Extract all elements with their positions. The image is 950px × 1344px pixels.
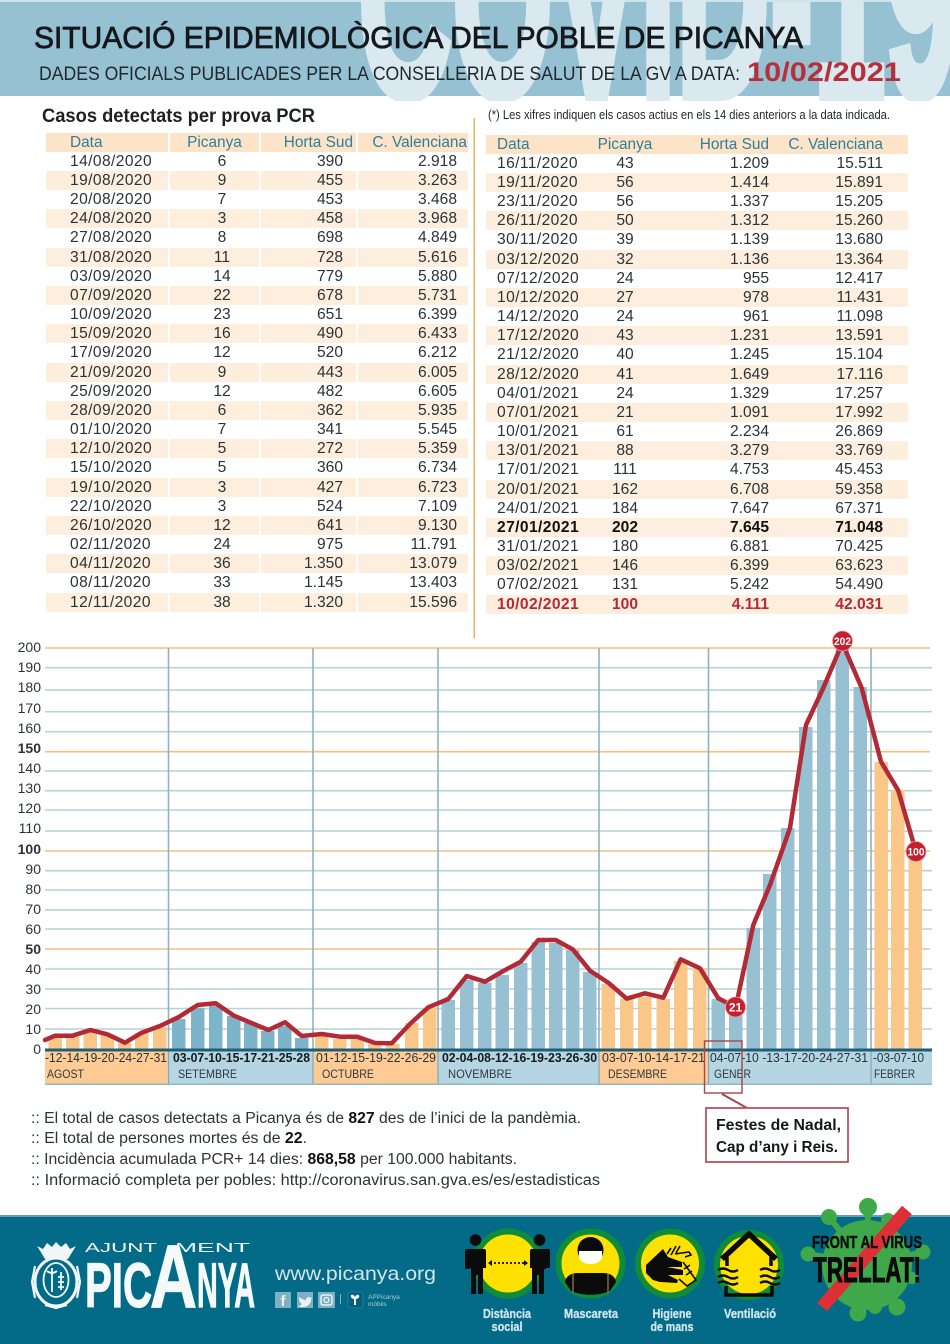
data point: 21 xyxy=(726,997,746,1017)
table: right PCR cases: 43 xyxy=(616,155,634,172)
table: right PCR cases: 1.337 xyxy=(730,193,769,210)
table: left PCR cases: 7 xyxy=(218,421,226,438)
table: left PCR cases: 8 xyxy=(218,229,226,246)
table: right PCR cases: 71.048 xyxy=(835,519,883,536)
logo: crest xyxy=(32,1242,80,1308)
table: right PCR cases: 24 xyxy=(616,385,634,402)
table: left PCR cases: 6.723 xyxy=(418,479,457,496)
icon labels: Distància xyxy=(483,1307,532,1321)
table: right PCR cases: 180 xyxy=(612,538,638,555)
table: right PCR cases: 21 xyxy=(616,404,634,421)
table: right PCR cases: 955 xyxy=(743,270,769,287)
table: left PCR cases: 9 xyxy=(218,364,226,381)
table: right PCR cases: 15.205 xyxy=(835,193,883,210)
table: right PCR cases: 28/12/2020 xyxy=(497,366,579,383)
table: right PCR cases: 12.417 xyxy=(835,270,883,287)
table: left PCR cases: 31/08/2020 xyxy=(70,249,152,266)
table: left PCR cases: 5.880 xyxy=(418,268,457,285)
logo: AJUNTAMENT: AJUNT xyxy=(85,1240,157,1255)
table: right PCR cases: 15.104 xyxy=(835,346,883,363)
table: left PCR cases: 3 xyxy=(218,210,226,227)
table: left PCR cases: 5.545 xyxy=(418,421,457,438)
table: right PCR cases: 39 xyxy=(616,231,634,248)
table: left PCR cases: 5.616 xyxy=(418,249,457,266)
subtitle: DADES OFICIALS PUBLICADES PER LA CONSELLERIA DE SALUT DE LA GV A DATA: xyxy=(39,64,740,85)
logo: AJUNTAMENT xyxy=(85,1240,250,1255)
table: left PCR cases: 9 xyxy=(218,172,226,189)
table: right PCR cases: 1.414 xyxy=(730,174,769,191)
bars xyxy=(48,648,922,1049)
table: right PCR cases: 03/12/2020 xyxy=(497,251,579,268)
table: left PCR cases: 7.109 xyxy=(418,498,457,515)
table: right PCR cases: 1.139 xyxy=(730,231,769,248)
date tick labels: 03-07-10-15-17-21-25-28 xyxy=(173,1050,310,1065)
table: left PCR cases: 10/09/2020 xyxy=(70,306,152,323)
table: right PCR cases: 10/01/2021 xyxy=(497,423,579,440)
table: right PCR cases: 63.623 xyxy=(835,557,883,574)
footer band xyxy=(0,1215,950,1344)
table: right PCR cases: Horta Sud xyxy=(700,136,769,152)
table: left PCR cases: 6.605 xyxy=(418,383,457,400)
table: right PCR cases: 1.231 xyxy=(730,327,769,344)
table: left PCR cases: 2.918 xyxy=(418,153,457,170)
table: left PCR cases: 453 xyxy=(317,191,343,208)
table: right PCR cases: 30/11/2020 xyxy=(497,231,578,248)
table: right PCR cases: 17/01/2021 xyxy=(497,461,579,478)
table: left PCR cases: 3.968 xyxy=(418,210,457,227)
table: right PCR cases: Picanya xyxy=(598,136,652,152)
table: left PCR cases: 11.791 xyxy=(410,536,457,553)
table: left PCR cases: 524 xyxy=(317,498,343,515)
y axis labels: 80 xyxy=(25,881,41,897)
social icons: f xyxy=(280,1293,286,1310)
table heading: Casos detectats per prova PCR xyxy=(42,106,315,127)
icon: social distance xyxy=(465,1232,550,1296)
table: right PCR cases: 15.891 xyxy=(835,174,883,191)
y axis labels: 10 xyxy=(25,1021,41,1037)
y axis labels: 110 xyxy=(19,820,41,836)
data point: 202 xyxy=(832,631,852,651)
table: left PCR cases: 19/08/2020 xyxy=(70,172,152,189)
icon: mask xyxy=(558,1232,622,1296)
table: left PCR cases: 678 xyxy=(317,287,343,304)
table: left PCR cases: 728 xyxy=(317,249,343,266)
report date: 10/02/2021 xyxy=(747,57,901,87)
table: right PCR cases: 1.649 xyxy=(730,366,769,383)
y axis labels: 170 xyxy=(18,700,41,716)
title: SITUACIÓ EPIDEMIOLÒGICA DEL POBLE DE PICANYA xyxy=(34,20,803,55)
table: left PCR cases: 5.935 xyxy=(418,402,457,419)
table: right PCR cases: 31/01/2021 xyxy=(497,538,579,555)
table: right PCR cases: 21/12/2020 xyxy=(497,346,579,363)
table: right PCR cases: 14/12/2020 xyxy=(497,308,579,325)
table: right PCR cases: 1.136 xyxy=(730,251,769,268)
table: left PCR cases: 779 xyxy=(317,268,343,285)
table: left PCR cases: 6.212 xyxy=(418,344,457,361)
table: left PCR cases: 520 xyxy=(317,344,343,361)
date tick labels: 01-12-15-19-22-26-29 xyxy=(316,1050,436,1065)
table: right PCR cases: 184 xyxy=(612,500,638,517)
table: left PCR cases: 12/11/2020 xyxy=(70,594,151,611)
date tick labels: -12-14-19-20-24-27-31 xyxy=(45,1050,167,1065)
table: right PCR cases: 131 xyxy=(612,576,638,593)
table: right PCR cases: 961 xyxy=(743,308,769,325)
table: left PCR cases: 13.403 xyxy=(409,574,457,591)
table: left PCR cases: 698 xyxy=(317,229,343,246)
callout: holidays xyxy=(704,1041,848,1162)
table: left PCR cases: 16 xyxy=(213,325,231,342)
table: left PCR cases: 6 xyxy=(218,153,226,170)
table: left PCR cases: 21/09/2020 xyxy=(70,364,152,381)
table: left PCR cases: 12 xyxy=(213,517,231,534)
line and bar chart xyxy=(18,631,932,1085)
table: right PCR cases: 61 xyxy=(616,423,634,440)
table: left PCR cases: Picanya xyxy=(187,134,242,150)
table: left PCR cases: 1.145 xyxy=(304,574,343,591)
table: left PCR cases: 12/10/2020 xyxy=(70,440,152,457)
table: left PCR cases: 14/08/2020 xyxy=(70,153,152,170)
table: left PCR cases: Data xyxy=(70,134,103,150)
table: left PCR cases: 6.433 xyxy=(418,325,457,342)
table: left PCR cases: 5 xyxy=(218,459,226,476)
logo: PICANYA: A xyxy=(150,1226,197,1326)
table: right PCR cases: 07/12/2020 xyxy=(497,270,579,287)
table: right PCR cases: 13/01/2021 xyxy=(497,442,579,459)
y axis labels: 100 xyxy=(18,841,41,857)
table: right PCR cases: 70.425 xyxy=(835,538,883,555)
table: left PCR cases: 20/08/2020 xyxy=(70,191,152,208)
summary notes xyxy=(31,1110,600,1189)
table: left PCR cases: C. Valenciana xyxy=(372,134,467,150)
y axis labels: 0 xyxy=(33,1041,41,1057)
table: right PCR cases: 4.111 xyxy=(732,596,769,613)
data point: 100 xyxy=(906,842,926,862)
table: right PCR cases: 20/01/2021 xyxy=(497,481,579,498)
table: right PCR cases: 43 xyxy=(616,327,634,344)
icon labels: Higiene xyxy=(652,1307,692,1321)
website: www.picanya.org xyxy=(274,1263,436,1285)
table: right PCR cases: 50 xyxy=(616,212,634,229)
logo: PICANYA xyxy=(85,1226,255,1326)
header band xyxy=(0,0,950,101)
table: left PCR cases: 5.359 xyxy=(418,440,457,457)
text: NYA xyxy=(197,1251,255,1321)
y axis labels: 30 xyxy=(25,981,41,997)
table: left PCR cases: 5 xyxy=(218,440,226,457)
table: right PCR cases: 27/01/2021 xyxy=(497,519,579,536)
table: left PCR cases: 1.350 xyxy=(304,555,343,572)
table: right PCR cases: 17/12/2020 xyxy=(497,327,579,344)
table: left PCR cases: 11 xyxy=(214,249,230,266)
month labels: DESEMBRE xyxy=(608,1067,667,1081)
table: right PCR cases: 04/01/2021 xyxy=(497,385,579,402)
table: right PCR cases: 24/01/2021 xyxy=(497,500,579,517)
table: left PCR cases: 341 xyxy=(317,421,343,438)
table: right PCR cases: 6.881 xyxy=(730,538,769,555)
table: left PCR cases: 3.263 xyxy=(418,172,457,189)
table: left PCR cases: 24 xyxy=(213,536,231,553)
callout: holidays: Festes de Nadal, xyxy=(716,1117,841,1134)
table: left PCR cases: 38 xyxy=(213,594,231,611)
month labels: AGOST xyxy=(47,1067,85,1081)
table: right PCR cases: 16/11/2020 xyxy=(497,155,578,172)
table: right PCR cases: C. Valenciana xyxy=(788,136,883,152)
table: right PCR cases: 6.708 xyxy=(730,481,769,498)
table: right PCR cases: 11.098 xyxy=(836,308,883,325)
y axis labels: 160 xyxy=(18,720,41,736)
table: right PCR cases: 24 xyxy=(616,308,634,325)
table: right PCR cases: 26.869 xyxy=(835,423,883,440)
table: right PCR cases: 100 xyxy=(612,596,638,613)
table: right PCR cases: 17.257 xyxy=(835,385,883,402)
table: right PCR cases: 146 xyxy=(612,557,638,574)
table: left PCR cases: 15.596 xyxy=(409,594,457,611)
table: right PCR cases: 17.992 xyxy=(835,404,883,421)
y axis labels: 190 xyxy=(18,659,41,675)
table: left PCR cases: 13.079 xyxy=(409,555,457,572)
table: left PCR cases: 27/08/2020 xyxy=(70,229,152,246)
table: left PCR cases: 1.320 xyxy=(304,594,343,611)
table: left PCR cases: Horta Sud xyxy=(284,134,353,150)
table: right PCR cases: 11.431 xyxy=(836,289,883,306)
y axis labels: 60 xyxy=(25,921,41,937)
table: right PCR cases: 33.769 xyxy=(835,442,883,459)
table: right PCR cases: 13.680 xyxy=(835,231,883,248)
y axis labels: 40 xyxy=(25,961,41,977)
month labels: FEBRER xyxy=(874,1067,915,1081)
table: right PCR cases: 17.116 xyxy=(836,366,883,383)
y axis labels: 140 xyxy=(18,760,41,776)
table: left PCR cases: 12 xyxy=(213,383,231,400)
icon: hand hygiene xyxy=(638,1232,702,1296)
table: left PCR cases: 5.731 xyxy=(418,287,457,304)
data point: 100: 100 xyxy=(908,846,924,858)
table: left PCR cases: 24/08/2020 xyxy=(70,210,152,227)
table: left PCR cases: 455 xyxy=(317,172,343,189)
table: right PCR cases: 6.399 xyxy=(730,557,769,574)
y axis labels: 120 xyxy=(18,800,41,816)
table: left PCR cases: 272 xyxy=(317,440,343,457)
table: right PCR cases: 1.091 xyxy=(730,404,769,421)
icon labels: de mans xyxy=(650,1320,694,1334)
month labels: SETEMBRE xyxy=(178,1067,237,1081)
month labels xyxy=(47,1067,915,1081)
summary notes: :: El total de casos detectats a Picanya és de 827 des de l’inici de la pandèmia. xyxy=(31,1110,581,1127)
table: left PCR cases: 3.468 xyxy=(418,191,457,208)
table: right PCR cases: 07/02/2021 xyxy=(497,576,579,593)
table: right PCR cases: 162 xyxy=(612,481,638,498)
date tick labels: -03-07-10 xyxy=(873,1050,924,1065)
table: right PCR cases: 19/11/2020 xyxy=(497,174,578,191)
logo: AJUNTAMENT: MENT xyxy=(175,1240,250,1255)
table: right PCR cases: 978 xyxy=(743,289,769,306)
table: left PCR cases: 14 xyxy=(213,268,231,285)
table: right PCR cases: 24 xyxy=(616,270,634,287)
table: left PCR cases: 25/09/2020 xyxy=(70,383,152,400)
table: right PCR cases: 67.371 xyxy=(835,500,883,517)
y axis labels: 200 xyxy=(18,639,41,655)
table: right PCR cases: 13.364 xyxy=(835,251,883,268)
table: right PCR cases: 10/02/2021 xyxy=(497,596,579,613)
data point: 21: 21 xyxy=(729,1000,742,1014)
table: right PCR cases: 26/11/2020 xyxy=(497,212,578,229)
table: left PCR cases: 362 xyxy=(317,402,343,419)
table: left PCR cases: 15/10/2020 xyxy=(70,459,152,476)
table: left PCR cases: 26/10/2020 xyxy=(70,517,152,534)
table: left PCR cases: 458 xyxy=(317,210,343,227)
table: right PCR cases: 45.453 xyxy=(835,461,883,478)
table: left PCR cases: 07/09/2020 xyxy=(70,287,152,304)
month labels: NOVEMBRE xyxy=(448,1067,512,1081)
table: right PCR cases: 07/01/2021 xyxy=(497,404,579,421)
month bands xyxy=(45,1048,932,1085)
logo: PICANYA: PIC xyxy=(85,1251,152,1321)
table: right PCR cases: 03/02/2021 xyxy=(497,557,579,574)
badge: front al virus xyxy=(800,1198,930,1322)
table: left PCR cases: 641 xyxy=(317,517,343,534)
table: right PCR cases: 23/11/2020 xyxy=(497,193,578,210)
icon labels: Ventilació xyxy=(724,1307,776,1321)
month labels: OCTUBRE xyxy=(322,1067,374,1081)
table: right PCR cases: 10/12/2020 xyxy=(497,289,579,306)
icon labels: social xyxy=(492,1320,522,1334)
y axis labels: 70 xyxy=(25,901,41,917)
table: left PCR cases: 427 xyxy=(317,479,343,496)
column divider xyxy=(474,118,475,638)
table: left PCR cases: 17/09/2020 xyxy=(70,344,152,361)
table: right PCR cases: 1.209 xyxy=(730,155,769,172)
data point: 202: 202 xyxy=(834,636,851,648)
table: left PCR cases: 651 xyxy=(317,306,343,323)
table: left PCR cases: 360 xyxy=(317,459,343,476)
table: right PCR cases: 54.490 xyxy=(835,576,883,593)
table: left PCR cases: 22/10/2020 xyxy=(70,498,152,515)
table: left PCR cases: 3 xyxy=(218,479,226,496)
table: right PCR cases: 32 xyxy=(616,251,634,268)
table: right PCR cases: 1.312 xyxy=(730,212,769,229)
month labels: GENER xyxy=(714,1067,751,1081)
table: left PCR cases: 12 xyxy=(213,344,231,361)
table: left PCR cases: 390 xyxy=(317,153,343,170)
summary notes: :: Informació completa per pobles: http://coronavirus.san.gva.es/es/estadisticas xyxy=(31,1172,600,1189)
table: left PCR cases: 482 xyxy=(317,383,343,400)
table: right PCR cases: 7.647 xyxy=(730,500,769,517)
table: left PCR cases: 7 xyxy=(218,191,226,208)
table: left PCR cases: 975 xyxy=(317,536,343,553)
table: right PCR cases: 2.234 xyxy=(730,423,769,440)
table: right PCR cases: 3.279 xyxy=(730,442,769,459)
table: right PCR cases: 5.242 xyxy=(730,576,769,593)
table: left PCR cases: 28/09/2020 xyxy=(70,402,152,419)
table: right PCR cases: 56 xyxy=(616,174,634,191)
table: left PCR cases: 15/09/2020 xyxy=(70,325,152,342)
table: right PCR cases: 202 xyxy=(612,519,638,536)
table: left PCR cases: 33 xyxy=(213,574,231,591)
grid lines xyxy=(45,648,932,1050)
icon: ventilation xyxy=(717,1233,781,1297)
summary notes: :: Incidència acumulada PCR+ 14 dies: 868,58 per 100.000 habitants. xyxy=(31,1151,517,1168)
y axis labels: 20 xyxy=(25,1001,41,1017)
callout: holidays: Cap d’any i Reis. xyxy=(716,1139,838,1156)
table: right PCR cases: 7.645 xyxy=(730,519,769,536)
table: left PCR cases: 6 xyxy=(218,402,226,419)
table footnote: (*) Les xifres indiquen els casos actius en els 14 dies anteriors a la data indicada. xyxy=(488,108,890,122)
table: left PCR cases: 02/11/2020 xyxy=(70,536,151,553)
table: left PCR cases: 443 xyxy=(317,364,343,381)
table: right PCR cases xyxy=(486,135,908,614)
y axis labels: 50 xyxy=(25,941,41,957)
table: left PCR cases: 08/11/2020 xyxy=(70,574,151,591)
table: left PCR cases: 4.849 xyxy=(418,229,457,246)
table: left PCR cases xyxy=(46,133,468,612)
table: right PCR cases: 59.358 xyxy=(835,481,883,498)
table: left PCR cases: 6.734 xyxy=(418,459,457,476)
date tick labels xyxy=(45,1050,924,1065)
table: right PCR cases: 4.753 xyxy=(730,461,769,478)
table: left PCR cases: 03/09/2020 xyxy=(70,268,152,285)
y axis labels: 130 xyxy=(18,780,41,796)
summary notes: :: El total de persones mortes és de 22. xyxy=(31,1130,307,1147)
table: right PCR cases: 1.329 xyxy=(730,385,769,402)
date tick labels: 03-07-10-14-17-21 xyxy=(602,1050,705,1065)
table: left PCR cases: 01/10/2020 xyxy=(70,421,152,438)
y axis labels: 150 xyxy=(18,740,41,756)
table: right PCR cases: 88 xyxy=(616,442,634,459)
icon labels xyxy=(483,1307,776,1334)
table: left PCR cases: 3 xyxy=(218,498,226,515)
table: left PCR cases: 6.399 xyxy=(418,306,457,323)
table: right PCR cases: 15.260 xyxy=(835,212,883,229)
social icons: APPicanya xyxy=(368,1294,400,1301)
table: right PCR cases: 42.031 xyxy=(835,596,883,613)
icon labels: Mascareta xyxy=(564,1307,619,1321)
y axis labels: 180 xyxy=(18,679,41,695)
table: left PCR cases: 6.005 xyxy=(418,364,457,381)
table: right PCR cases: 15.511 xyxy=(836,155,883,172)
date tick labels: 02-04-08-12-16-19-23-26-30 xyxy=(442,1050,597,1065)
table: left PCR cases: 23 xyxy=(213,306,231,323)
table: right PCR cases: 1.245 xyxy=(730,346,769,363)
table: right PCR cases: 56 xyxy=(616,193,634,210)
table: left PCR cases: 9.130 xyxy=(418,517,457,534)
y axis labels xyxy=(18,639,41,1057)
date tick labels: 04-07-10 -13-17-20-24-27-31 xyxy=(710,1050,868,1065)
table: right PCR cases: 27 xyxy=(616,289,634,306)
table: right PCR cases: 41 xyxy=(616,366,634,383)
table: left PCR cases: 22 xyxy=(213,287,231,304)
table: left PCR cases: 04/11/2020 xyxy=(70,555,151,572)
table: left PCR cases: 19/10/2020 xyxy=(70,479,152,496)
table: left PCR cases: 36 xyxy=(213,555,231,572)
table: left PCR cases: 490 xyxy=(317,325,343,342)
table: right PCR cases: 111 xyxy=(613,461,637,478)
y axis labels: 90 xyxy=(25,861,41,877)
table: right PCR cases: Data xyxy=(497,136,530,152)
social icons xyxy=(275,1292,400,1310)
table: right PCR cases: 40 xyxy=(616,346,634,363)
table: right PCR cases: 13.591 xyxy=(835,327,883,344)
social icons: mòbils xyxy=(368,1301,388,1308)
trend line xyxy=(45,643,916,1043)
